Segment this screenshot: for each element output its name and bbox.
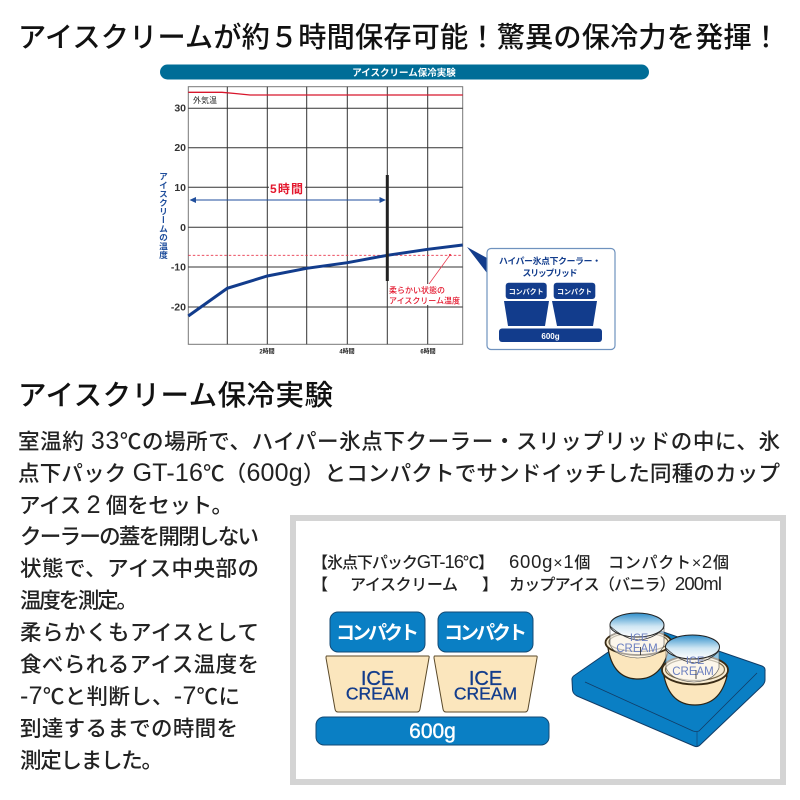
cooler diagram callout: コンパクト bbox=[557, 287, 592, 296]
ice cream cup right: ICE bbox=[469, 668, 502, 690]
cup one bbox=[606, 613, 672, 679]
description text: 点下パック GT-16℃（600g）とコンパクトでサンドイッチした同種のカップ bbox=[18, 459, 780, 487]
soft state callout: アイスクリーム温度 bbox=[389, 296, 460, 306]
outside temperature line bbox=[188, 92, 463, 95]
description text: クーラーの蓋を開閉しない bbox=[20, 525, 259, 549]
section heading: アイスクリーム保冷実験 bbox=[18, 380, 333, 412]
title: アイスクリームが約５時間保存可能！驚異の保冷力を発揮！ bbox=[18, 21, 780, 53]
spec text: 【 bbox=[312, 577, 328, 594]
x axis hour labels: 6時間 bbox=[420, 348, 436, 356]
spec text: 【氷点下パックGT-16℃】 bbox=[312, 551, 494, 572]
description text: -7℃と判断し、-7℃に bbox=[20, 682, 240, 710]
cooler diagram callout bbox=[467, 247, 615, 350]
description text: 状態で、アイス中央部の bbox=[20, 557, 259, 581]
y axis ticks: 0 bbox=[180, 222, 186, 234]
spec text: アイスクリーム bbox=[350, 576, 458, 594]
chart header bar: アイスクリーム保冷実験 bbox=[352, 67, 456, 79]
outside temperature label: 外気温 bbox=[193, 95, 217, 105]
compact pack left: コンパクト bbox=[336, 622, 419, 644]
600g pack: 600g bbox=[409, 720, 456, 743]
y axis ticks: 30 bbox=[174, 102, 186, 114]
cup two: ICE bbox=[686, 655, 704, 667]
x axis hour labels bbox=[259, 348, 436, 356]
ice cream cup left bbox=[326, 656, 429, 712]
cup two bbox=[662, 635, 728, 705]
description text: 到達するまでの時間を bbox=[20, 717, 238, 741]
spec text: カップアイス（バニラ）200ml bbox=[509, 573, 722, 594]
y axis ticks: 10 bbox=[174, 182, 186, 194]
y axis ticks: -10 bbox=[171, 262, 186, 274]
five hour label: 5時間 bbox=[270, 181, 303, 196]
spec text bbox=[312, 551, 729, 594]
compact pack left bbox=[330, 612, 425, 652]
ice cream cup left: CREAM bbox=[346, 684, 409, 704]
ice cream cup right bbox=[434, 656, 537, 712]
panel: experiment setup bbox=[293, 518, 783, 782]
description text: 測定しました。 bbox=[20, 749, 163, 773]
cooler diagram callout: スリップリッド bbox=[522, 268, 578, 278]
y axis label: アイスクリームの温度 bbox=[158, 172, 168, 260]
y axis ticks bbox=[171, 102, 186, 314]
description text: 柔らかくもアイスとして bbox=[20, 621, 259, 645]
spec text: 】 bbox=[482, 577, 498, 594]
five hour arrow bbox=[190, 197, 386, 203]
blue pack bbox=[572, 626, 765, 747]
description text: 温度を測定。 bbox=[20, 589, 138, 613]
cup one: CREAM bbox=[616, 643, 658, 655]
ice cream cup right: CREAM bbox=[454, 684, 517, 704]
description text: アイス 2 個をセット。 bbox=[19, 491, 233, 519]
sandwich diagram bbox=[316, 612, 549, 745]
ice cream temperature curve bbox=[188, 245, 463, 316]
600g pack bbox=[316, 717, 549, 745]
spec text: 600g×1個 コンパクト×2個 bbox=[509, 551, 729, 572]
y axis ticks: -20 bbox=[171, 302, 186, 314]
soft threshold dashed line bbox=[188, 254, 463, 256]
cooler diagram callout: ハイパー氷点下クーラー・ bbox=[499, 255, 601, 266]
line chart: ice cream temperature bbox=[158, 87, 463, 355]
description text bbox=[18, 427, 780, 773]
ice cream cup left: ICE bbox=[361, 668, 394, 690]
y axis ticks: 20 bbox=[174, 142, 186, 154]
cooler diagram callout: コンパクト bbox=[509, 287, 544, 296]
x axis hour labels: 4時間 bbox=[339, 348, 355, 356]
x axis hour labels: 2時間 bbox=[259, 348, 275, 356]
soft state callout bbox=[388, 254, 461, 306]
description text: 食べられるアイス温度を bbox=[20, 653, 259, 677]
cup two: CREAM bbox=[672, 666, 714, 678]
chart header bar bbox=[160, 64, 649, 80]
compact pack right bbox=[438, 612, 533, 652]
cooler diagram callout: 600g bbox=[541, 332, 560, 341]
cup one: ICE bbox=[630, 632, 648, 644]
soft state callout: 柔らかい状態の bbox=[389, 285, 445, 295]
description text: 室温約 33℃の場所で、ハイパー氷点下クーラー・スリップリッドの中に、氷 bbox=[18, 427, 780, 455]
illustration: cups on blue pack bbox=[572, 613, 765, 747]
compact pack right: コンパクト bbox=[444, 622, 527, 644]
five hour marker bar bbox=[386, 175, 389, 281]
